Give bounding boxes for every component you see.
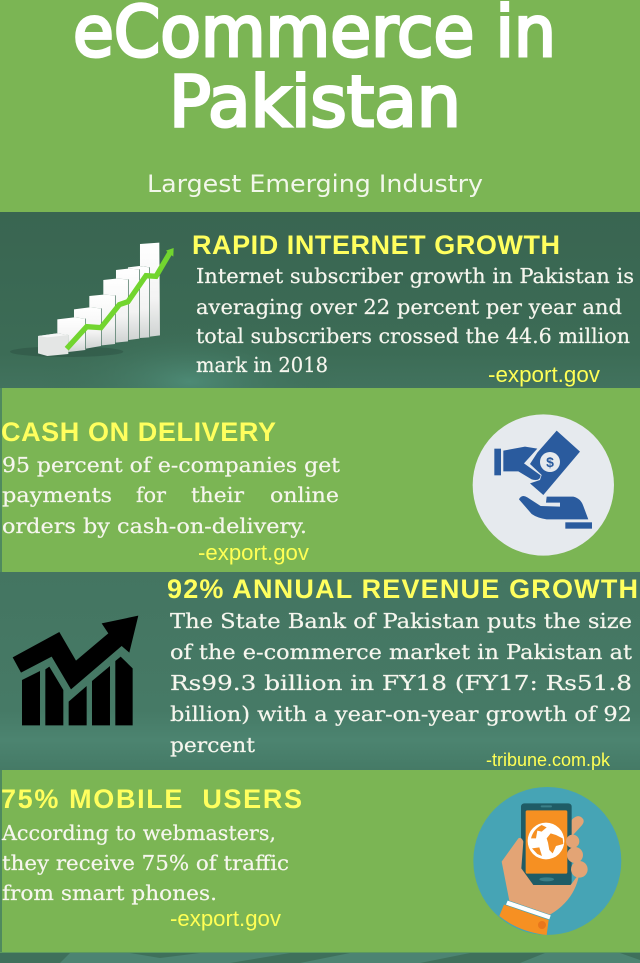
heading: RAPID INTERNET GROWTH: [192, 230, 560, 260]
text block: for: [136, 483, 166, 507]
text block: they receive 75% of traffic: [2, 851, 289, 875]
title: [73, 0, 556, 143]
icon: rising white bar chart with green arrow: [10, 243, 174, 357]
text block: According to webmasters,: [1, 821, 276, 845]
icon: cash changing hands: $: [546, 454, 554, 470]
header background: [0, 0, 640, 212]
source: -export.gov: [198, 540, 309, 565]
text block: of the e-commerce market in Pakistan at: [170, 640, 633, 664]
text block: [2, 453, 341, 538]
heading: 92% ANNUAL REVENUE GROWTH: [167, 574, 638, 604]
panel: cash on delivery: [0, 388, 640, 572]
heading: 75% MOBILE USERS: [1, 784, 302, 814]
footer mountain strip: [0, 953, 640, 963]
text block: their: [191, 483, 244, 507]
source: -export.gov: [170, 906, 281, 931]
panel: annual revenue growth: [0, 572, 640, 770]
text block: Internet subscriber growth in Pakistan is: [196, 264, 634, 288]
text block: mark in 2018: [196, 353, 328, 377]
source: -tribune.com.pk: [486, 750, 611, 770]
icon: black growth chart with arrow: [13, 616, 138, 725]
source: -export.gov: [488, 362, 600, 387]
icon: cash changing hands: [473, 414, 614, 556]
text block: from smart phones.: [2, 881, 217, 905]
text block: [196, 264, 634, 377]
text block: averaging over 22 percent per year and: [196, 295, 622, 319]
text block: orders by cash-on-delivery.: [2, 514, 307, 538]
text block: total subscribers crossed the 44.6 million: [196, 324, 630, 348]
text block: Rs99.3 billion in FY18 (FY17: Rs51.8: [170, 671, 632, 695]
text block: 95 percent of e-companies get: [2, 453, 341, 477]
heading: CASH ON DELIVERY: [1, 417, 276, 447]
text block: billion) with a year-on-year growth of 92: [170, 702, 632, 726]
panel: mobile users: [0, 770, 640, 953]
text block: payments: [2, 483, 112, 507]
title: Pakistan: [169, 61, 461, 143]
icon: hand holding smartphone: [473, 787, 621, 935]
text block: [170, 609, 633, 757]
text block: online: [270, 483, 339, 507]
panel: rapid internet growth: [0, 212, 640, 388]
text block: percent: [170, 733, 256, 757]
subtitle: Largest Emerging Industry: [147, 170, 483, 198]
text block: [1, 821, 289, 905]
text block: The State Bank of Pakistan puts the size: [170, 609, 632, 633]
